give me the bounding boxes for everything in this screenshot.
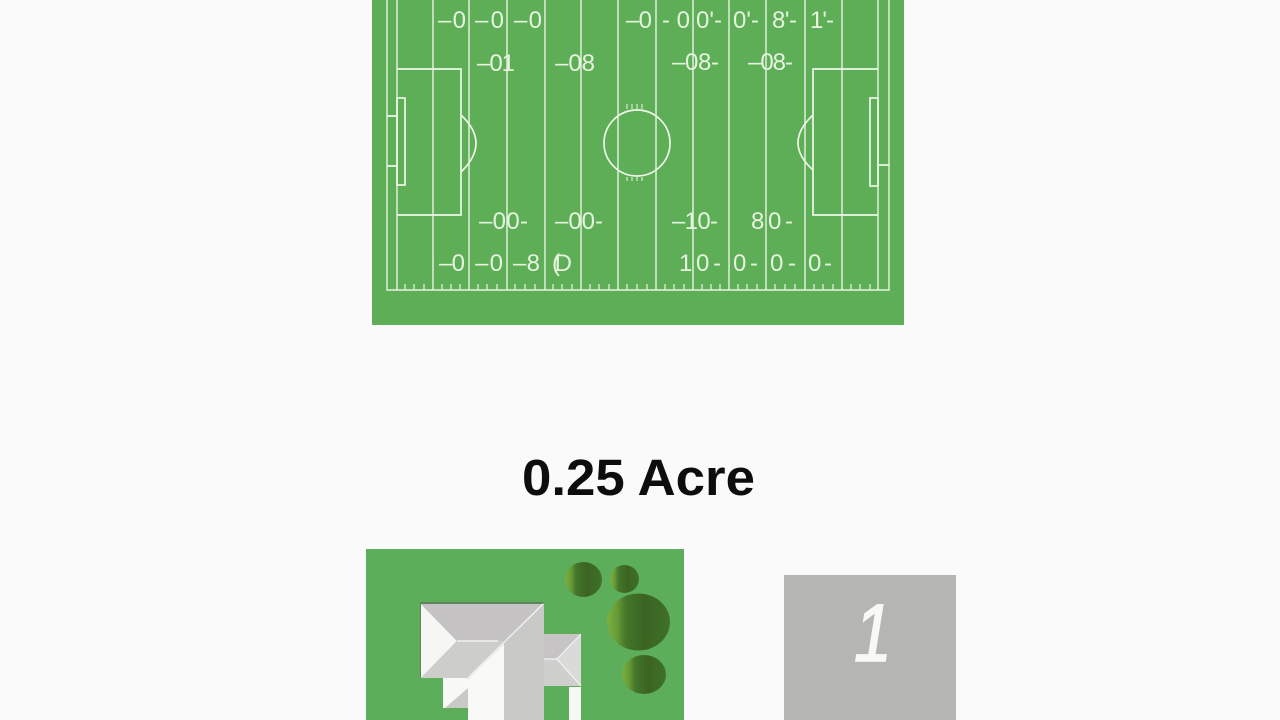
yard numbers: bottom row: 1 <box>679 250 692 277</box>
yard numbers: top row: –0 <box>438 7 466 34</box>
hash marks <box>405 284 870 290</box>
house roof <box>421 603 581 720</box>
panel: grey numbered square <box>784 575 956 720</box>
yard numbers: bottom row <box>439 250 832 277</box>
trees <box>565 562 670 694</box>
yard numbers: second row <box>477 49 793 77</box>
yard numbers: bottom row: 0- <box>733 250 758 277</box>
right penalty area <box>798 69 889 215</box>
yard numbers: third row: 80- <box>751 208 793 235</box>
yard numbers: top row: –0 <box>514 7 542 34</box>
field turf <box>372 0 904 325</box>
yard numbers: bottom row: 0- <box>696 250 721 277</box>
yard numbers: top row: 0'- <box>733 7 759 34</box>
yard numbers: top row: –0 <box>626 7 652 34</box>
yard numbers: second row: –08 <box>555 50 595 77</box>
yard numbers: bottom row: –0 <box>439 250 465 277</box>
tree 1 <box>565 562 602 597</box>
yard numbers: bottom row: –8 <box>513 250 540 277</box>
tree 3 <box>607 594 670 650</box>
yard numbers: third row: –00- <box>479 208 528 235</box>
yard numbers: third row: –10- <box>672 208 718 235</box>
yard numbers: bottom row: 0- <box>808 250 832 277</box>
tree 4 <box>622 655 666 694</box>
rear small roof <box>443 678 468 708</box>
grey square <box>784 575 956 720</box>
yard numbers: second row: –08- <box>748 49 793 76</box>
yard numbers: bottom row: 0- <box>770 250 796 277</box>
yard numbers: top row: 1'- <box>810 7 834 34</box>
yard numbers: top row: 8'- <box>772 7 797 34</box>
field boundary and yard lines <box>387 0 889 290</box>
panel: football field diagram <box>372 0 904 325</box>
yard numbers: top row: 0'- <box>696 7 722 34</box>
yard numbers: top row: –0 <box>475 7 504 34</box>
yard numbers: third row: –00- <box>555 208 603 235</box>
yard numbers: top row <box>438 7 834 34</box>
tree 2 <box>610 565 639 593</box>
yard numbers: second row: –01 <box>477 50 515 77</box>
number 1: 1 <box>854 588 892 679</box>
yard numbers: second row: –08- <box>672 49 719 76</box>
yard numbers: third row <box>479 208 793 235</box>
side wing roof <box>544 634 581 720</box>
yard numbers: bottom row: (D <box>552 250 572 277</box>
yard numbers: bottom row: –0 <box>475 250 503 277</box>
centre circle <box>604 104 670 181</box>
left penalty area <box>387 69 476 215</box>
heading: 0.25 Acre: 0.25 Acre <box>522 449 755 506</box>
main roof <box>421 603 544 720</box>
panel: quarter-acre lot with house <box>366 549 684 720</box>
yard numbers: top row: - 0 <box>662 7 690 34</box>
lawn <box>366 549 684 720</box>
